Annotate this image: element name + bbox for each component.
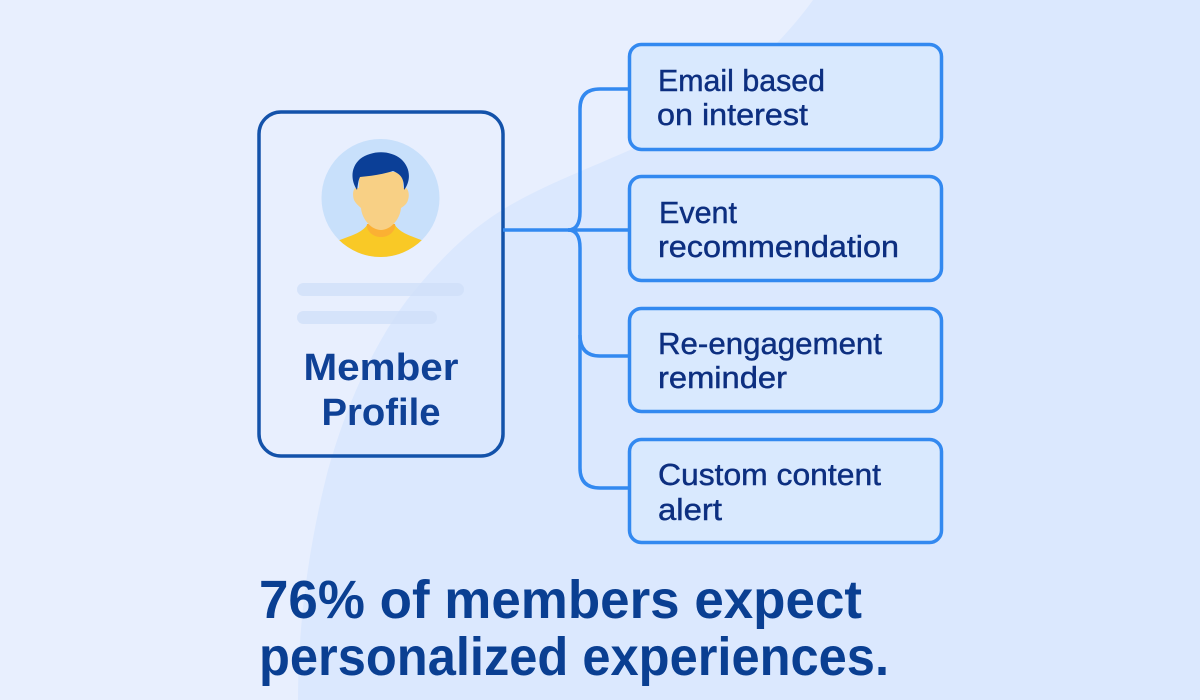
card title: Member [304, 347, 459, 389]
box: event recommendation: Event [659, 195, 737, 230]
box: email based on interest: Email based [658, 63, 825, 98]
panel: member profile card [259, 112, 503, 456]
background curve [298, 0, 1200, 700]
placeholder line 2 [297, 311, 437, 324]
headline: personalized experiences. [259, 627, 889, 687]
box: custom content alert: alert [658, 492, 722, 527]
box: custom content alert [630, 440, 942, 542]
box: email based on interest [630, 44, 942, 150]
box: re-engagement reminder [630, 308, 942, 412]
box: re-engagement reminder: Re-engagement [658, 326, 882, 361]
connector lines [503, 89, 630, 488]
box: event recommendation [630, 176, 942, 280]
box: email based on interest: on interest [657, 97, 808, 132]
icon: avatar [322, 139, 440, 262]
box: event recommendation: recommendation [658, 229, 899, 264]
placeholder line 1 [297, 283, 464, 296]
box: re-engagement reminder: reminder [658, 360, 787, 395]
card title: Profile [322, 392, 440, 434]
box: custom content alert: Custom content [658, 457, 881, 492]
headline: 76% of members expect [259, 570, 862, 630]
